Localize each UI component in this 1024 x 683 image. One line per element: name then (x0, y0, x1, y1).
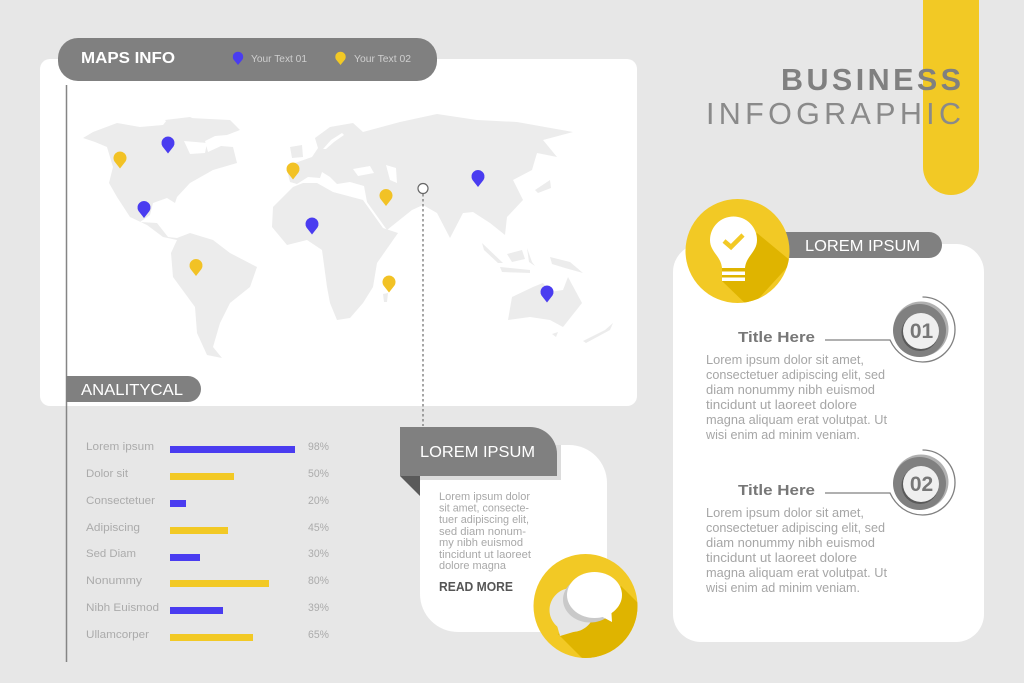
maps info header (58, 38, 437, 81)
inland seas on map (184, 133, 397, 183)
item 02 text: wisi enim ad minim veniam. (705, 581, 860, 595)
item 01 text: wisi enim ad minim veniam. (705, 428, 860, 442)
bar chart: 45% (308, 522, 329, 534)
item 02 text: diam nonummy nibh euismod (706, 536, 875, 550)
item 02 (705, 450, 955, 595)
item 01 text (705, 353, 888, 442)
pin: blue Canada (162, 137, 175, 154)
pin: blue Mexico (138, 201, 150, 218)
item 01 text: diam nonummy nibh euismod (706, 383, 875, 397)
bar chart: Ullamcorper (86, 629, 149, 641)
card text: Lorem ipsum dolor (439, 491, 530, 503)
maps info header: MAPS INFO (81, 50, 175, 67)
right header pill: LOREM IPSUM (805, 238, 920, 255)
pin: yellow Arabia (380, 189, 392, 206)
bar chart: 98% (308, 441, 329, 453)
bar chart (86, 441, 329, 641)
bar chart: Nibh Euismod (86, 602, 159, 614)
card text: tincidunt ut laoreet (439, 549, 531, 561)
pin: blue Africa (306, 218, 318, 234)
card header (400, 427, 557, 476)
bar chart: 20% (308, 495, 329, 507)
pin: yellow USA (114, 152, 127, 168)
item 01 text: magna aliquam erat volutpat. Ut (706, 413, 888, 427)
bar chart: Nonummy (86, 575, 143, 587)
panel: maps (40, 59, 637, 406)
bar chart: Consectetuer (86, 495, 155, 507)
world map (83, 114, 613, 358)
read more link: READ MORE (439, 580, 513, 594)
vertical axis line (66, 85, 68, 662)
card text: sit amet, consecte- (439, 502, 529, 514)
item 01 badge: 01 (910, 320, 933, 343)
map pins (114, 137, 554, 302)
item 02 badge: 02 (910, 473, 933, 496)
panel: lorem ipsum card: LOREM IPSUM (420, 444, 535, 461)
card header shadow (420, 445, 561, 480)
card ribbon fold (400, 476, 420, 496)
analytical header: ANALITYCAL (81, 382, 183, 399)
item 01 text: Lorem ipsum dolor sit amet, (706, 353, 864, 367)
legend pin blue (233, 52, 243, 65)
maps info header: Your Text 02 (354, 53, 411, 65)
card text: sed diam nonum- (439, 526, 526, 538)
yellow title band (923, 0, 979, 195)
item 01 text: consectetuer adipiscing elit, sed (706, 368, 885, 382)
right header pill (780, 232, 942, 258)
card text: dolore magna (439, 560, 507, 572)
bar chart: 39% (308, 602, 329, 614)
pin: blue Australia (540, 286, 554, 302)
dotted connector (418, 184, 428, 426)
pin: yellow Brazil (190, 259, 203, 276)
item 01 title: Title Here (738, 329, 815, 346)
card text (439, 491, 531, 572)
maps info header: Your Text 01 (251, 53, 307, 65)
item 02 title: Title Here (738, 482, 815, 499)
pin: yellow Spain (287, 163, 300, 180)
title (706, 63, 961, 131)
item 02 text: Lorem ipsum dolor sit amet, (706, 506, 864, 520)
item 02 text: tincidunt ut laoreet dolore (706, 551, 857, 565)
pin: blue Asia (472, 170, 485, 187)
panel: right card (673, 244, 984, 642)
item 02 text: magna aliquam erat volutpat. Ut (706, 566, 888, 580)
pin: yellow Madagascar (382, 276, 396, 292)
bar chart: 80% (308, 575, 329, 587)
analytical header (66, 376, 201, 402)
bar chart: Sed Diam (86, 548, 136, 560)
item 01 badge (825, 297, 955, 362)
bar chart: 30% (308, 548, 329, 560)
legend pin yellow (335, 52, 346, 65)
icon: light bulb (686, 199, 792, 308)
title: BUSINESS (781, 63, 961, 97)
card text: my nibh euismod (439, 537, 523, 549)
item 02 badge (825, 450, 955, 515)
item 02 text (705, 506, 888, 595)
bar chart: Adipiscing (86, 522, 140, 534)
card text: tuer adipiscing elit, (439, 514, 529, 526)
item 01 (705, 297, 955, 442)
panel: lorem ipsum card (400, 427, 607, 632)
item 01 text: tincidunt ut laoreet dolore (706, 398, 857, 412)
item 02 text: consectetuer adipiscing elit, sed (706, 521, 885, 535)
bar chart: Dolor sit (86, 468, 128, 480)
icon: chat bubbles (534, 554, 640, 660)
title: INFOGRAPHIC (706, 97, 961, 131)
bar chart: Lorem ipsum (86, 441, 154, 453)
bar chart: 65% (308, 629, 329, 641)
bar chart: 50% (308, 468, 329, 480)
